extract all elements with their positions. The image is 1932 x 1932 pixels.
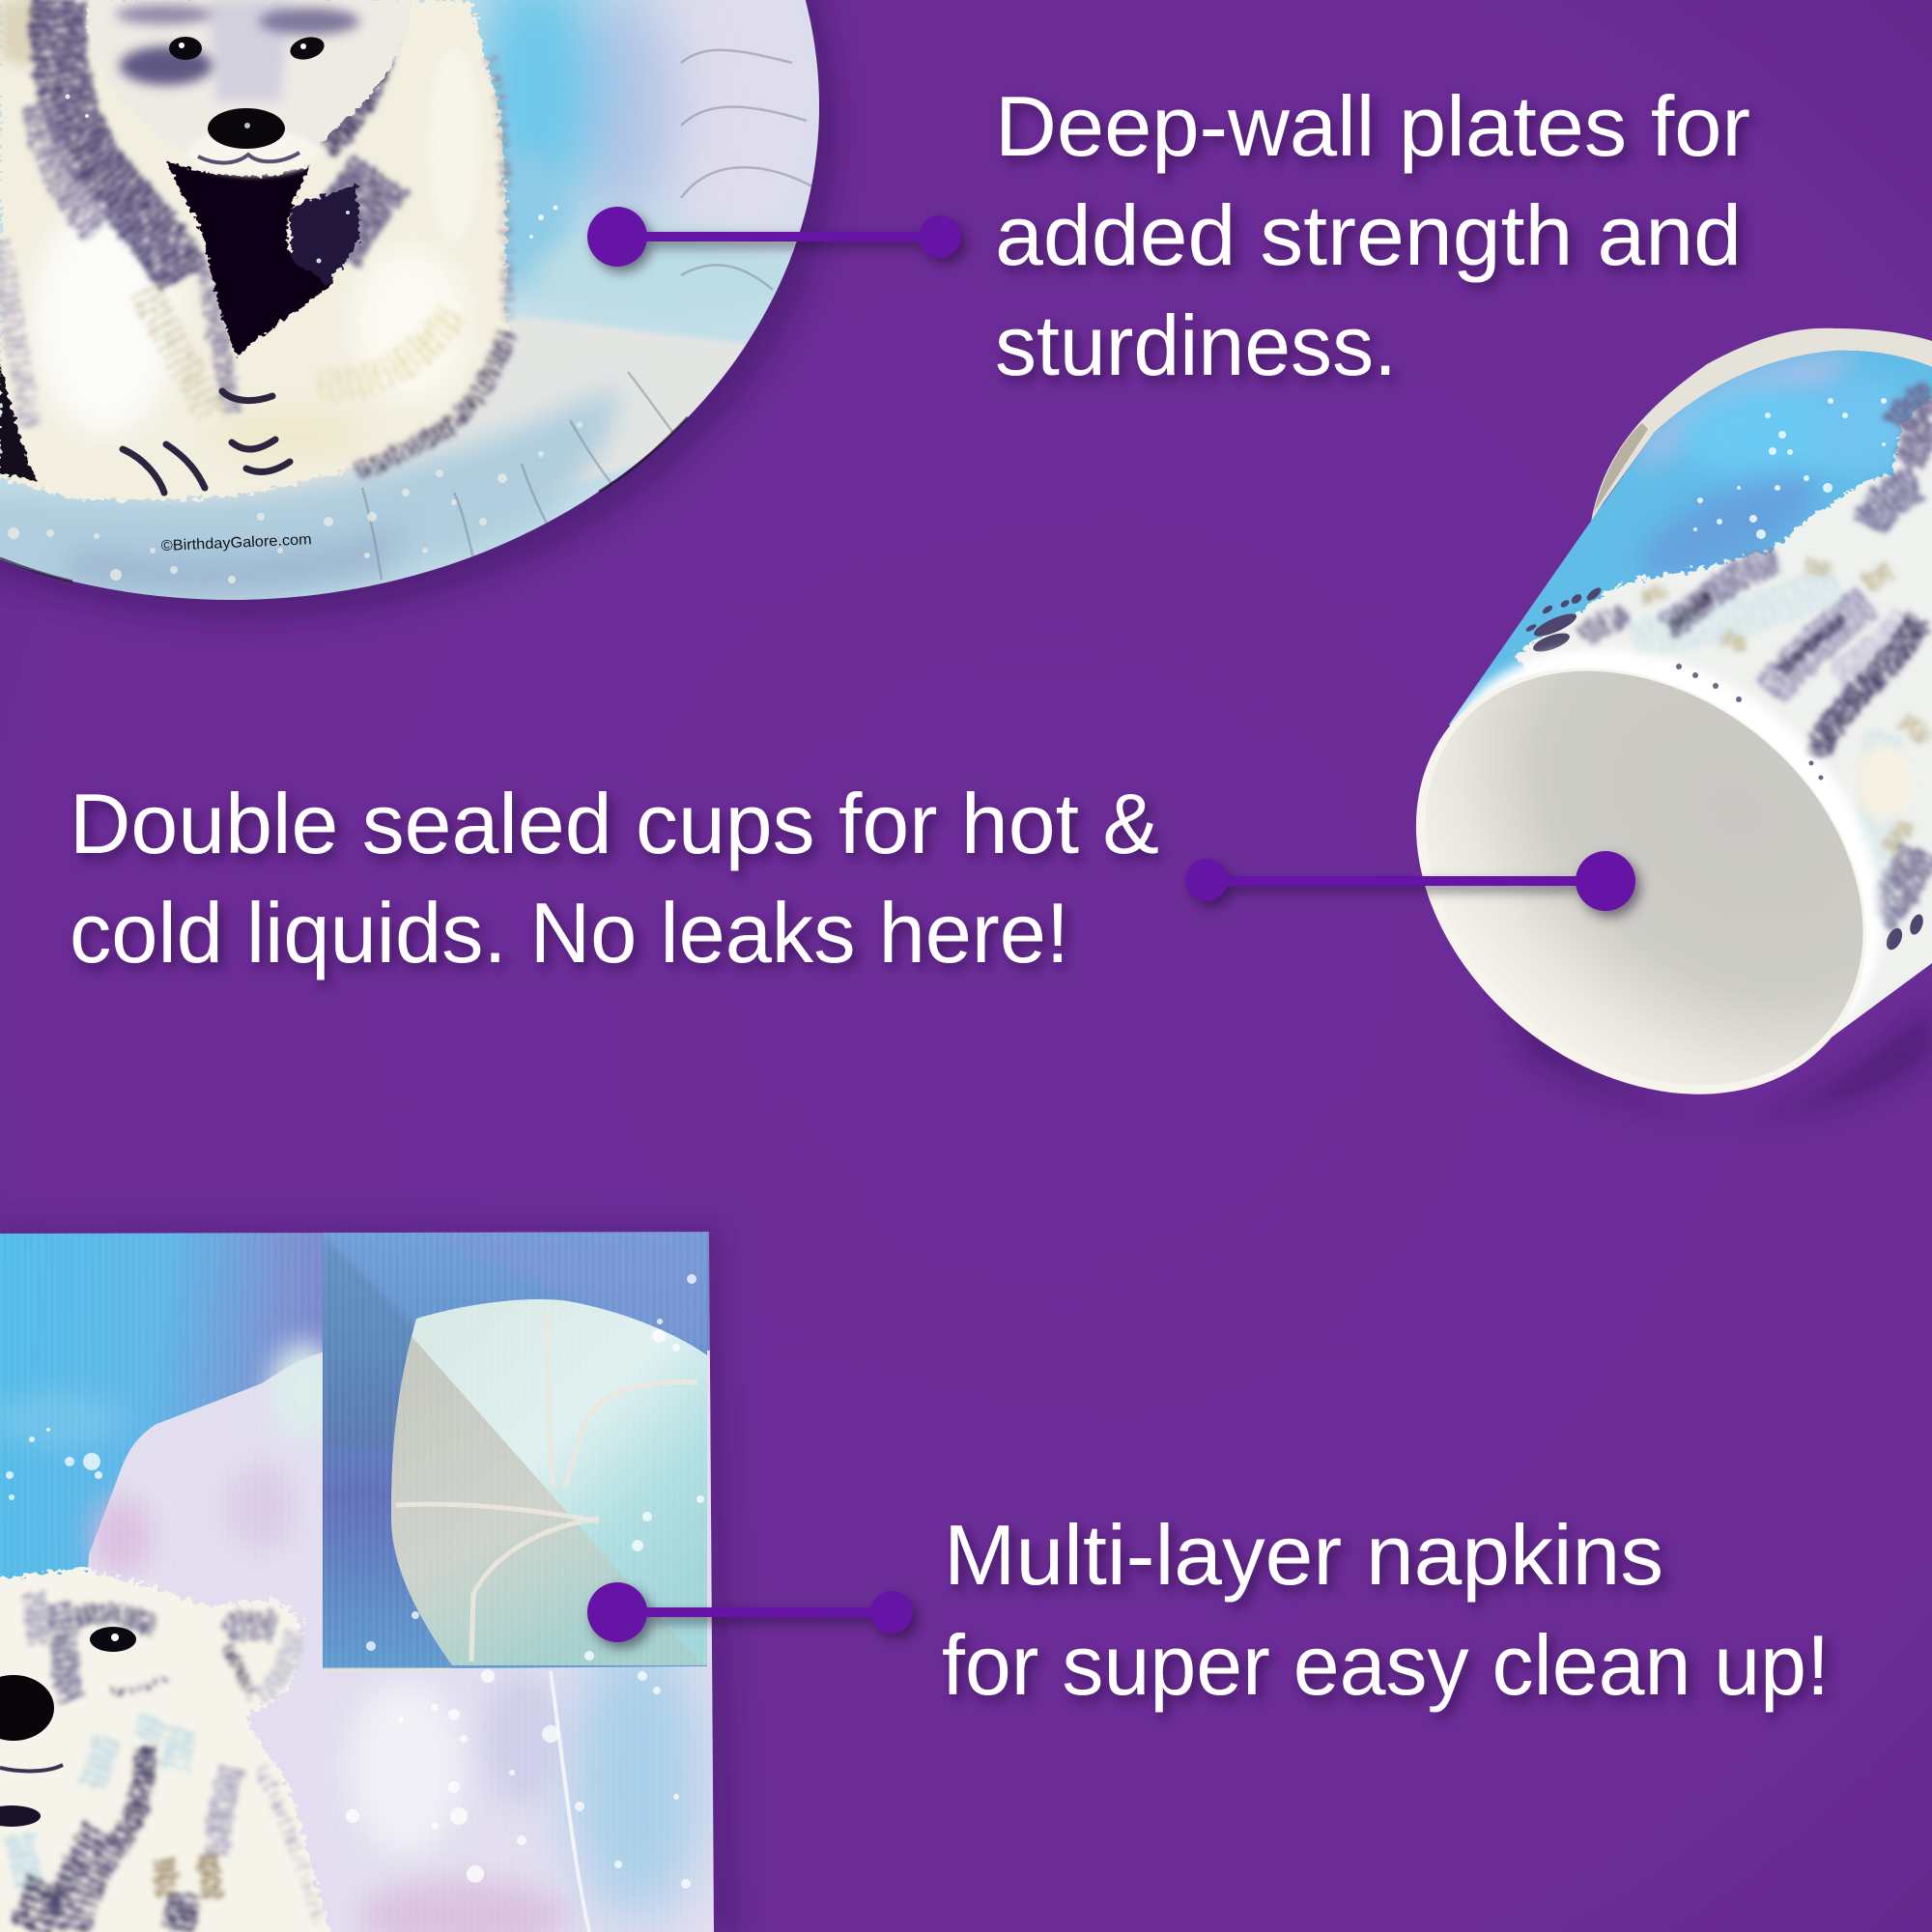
text: plates: sturdiness.	[995, 298, 1397, 393]
connector: cup	[1185, 851, 1635, 911]
text: plates: Deep-wall plates for	[995, 78, 1750, 174]
connector: napkin	[587, 1582, 913, 1642]
text: cups: cold liquids. No leaks here!	[70, 885, 1069, 980]
plate creases	[362, 50, 816, 580]
cup base	[1331, 580, 1932, 1182]
text: plates: added strength and	[995, 187, 1742, 283]
cup sky speckles	[1693, 398, 1887, 539]
left dark sliver	[0, 362, 37, 480]
polar bear on napkin	[0, 1568, 333, 1932]
chest	[166, 159, 333, 357]
text: napkins: Multi-layer napkins	[944, 1507, 1663, 1603]
flap edges	[323, 1667, 452, 1671]
cup	[1416, 328, 1932, 1117]
paw prints	[1525, 585, 1925, 952]
text: napkins: for super easy clean up!	[942, 1617, 1830, 1713]
napkin shadow	[0, 1225, 739, 1932]
napkin lower area	[68, 1350, 715, 1932]
snow speckles	[66, 95, 558, 277]
cup lip	[1591, 328, 1932, 522]
text: cups: Double sealed cups for hot &	[70, 776, 1159, 871]
connector: plate	[587, 207, 961, 267]
text: cups	[70, 776, 1159, 980]
napkin bear markings	[19, 1594, 319, 1932]
plate	[0, 0, 850, 619]
eyes and nose	[169, 37, 202, 60]
head	[88, 0, 411, 163]
napkin	[0, 1225, 739, 1932]
napkin sky	[0, 1232, 715, 1618]
napkin speckles	[6, 1428, 691, 1889]
text: plates	[995, 78, 1750, 393]
plate bear fur shading	[0, 0, 508, 471]
plate rim dark edge	[0, 417, 688, 582]
cup body	[1420, 350, 1932, 1074]
small band dots	[1676, 664, 1824, 781]
polar bear on plate	[0, 0, 582, 583]
plate shadow	[0, 0, 837, 619]
cup shadow	[1439, 821, 1932, 1117]
plate copyright: ©BirthdayGalore.com	[160, 531, 312, 554]
paws	[123, 391, 290, 493]
napkin fold flap	[323, 1233, 715, 1681]
cup white band	[1449, 641, 1890, 1037]
cup fur markings	[1584, 398, 1932, 927]
cup polar bear fur	[1514, 391, 1932, 1053]
flap moon	[323, 1236, 715, 1681]
plate surface	[0, 0, 819, 600]
text: napkins	[942, 1507, 1830, 1713]
